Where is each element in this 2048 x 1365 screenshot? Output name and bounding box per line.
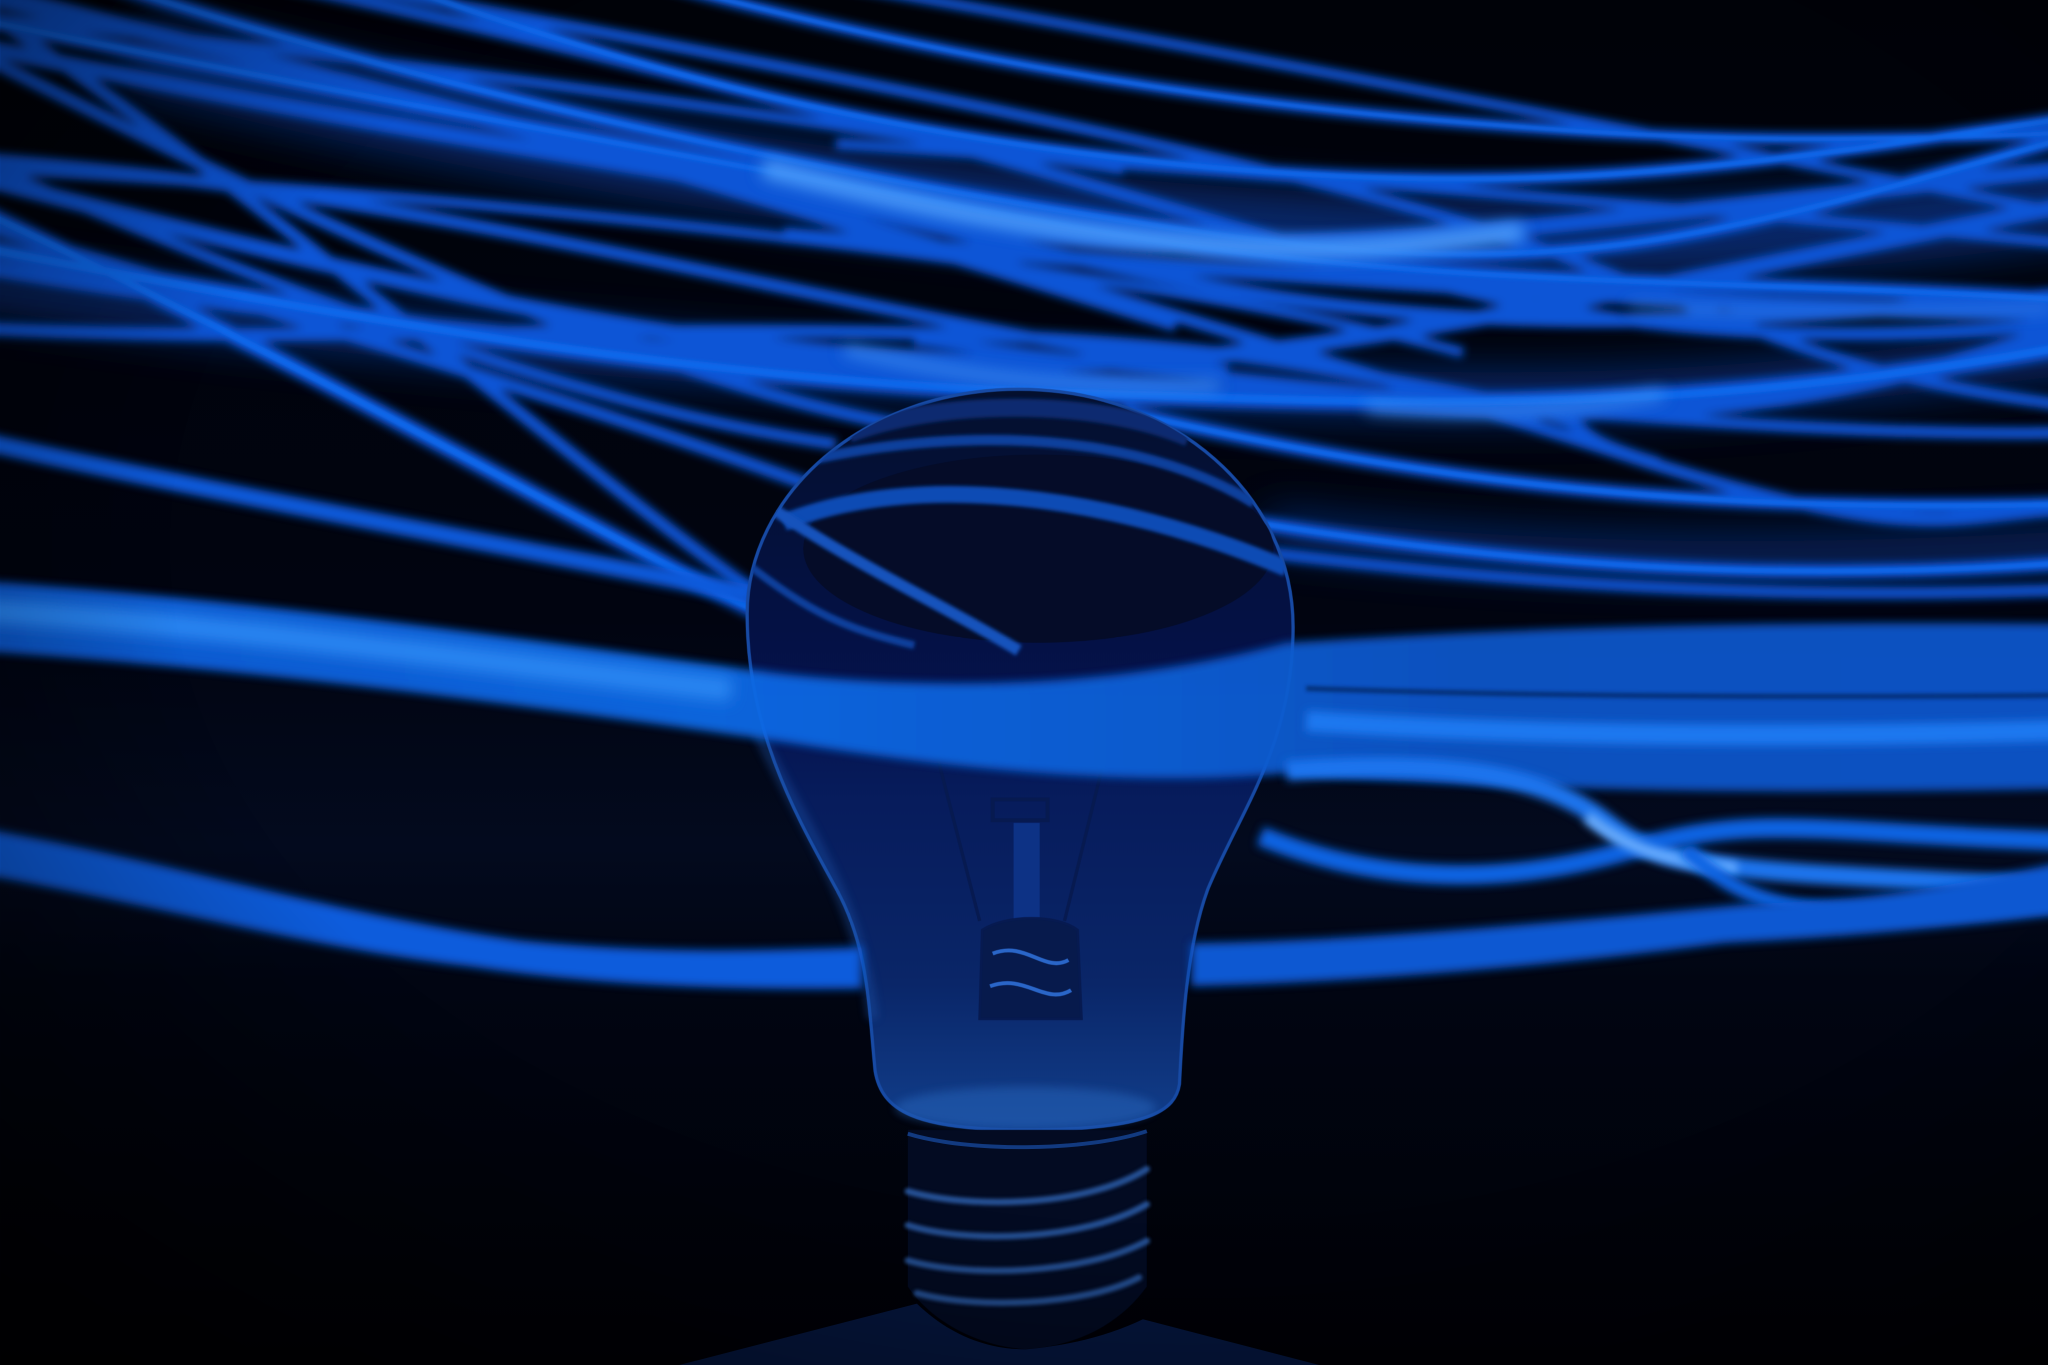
glow: soft haze behind upper trails <box>0 52 2048 555</box>
lower glass glow <box>895 1087 1156 1129</box>
screw threads <box>908 1169 1147 1303</box>
bulb glass <box>747 389 1293 1130</box>
upper light trails: wide soft strands <box>0 0 2048 611</box>
dark interior with refracted trails <box>744 408 1287 650</box>
wavy right trails <box>1260 767 2048 913</box>
filament and stem <box>921 692 1121 1019</box>
lower light band <box>0 823 2048 989</box>
table surface <box>679 1304 1319 1365</box>
left sweeping trail <box>0 434 751 594</box>
main wide light band <box>0 579 2048 791</box>
upper light trails: crisp strand cores <box>0 0 2048 611</box>
light bulb <box>744 389 1293 1130</box>
screw base <box>908 1130 1147 1349</box>
bright highlights on upper trails <box>771 170 2048 411</box>
